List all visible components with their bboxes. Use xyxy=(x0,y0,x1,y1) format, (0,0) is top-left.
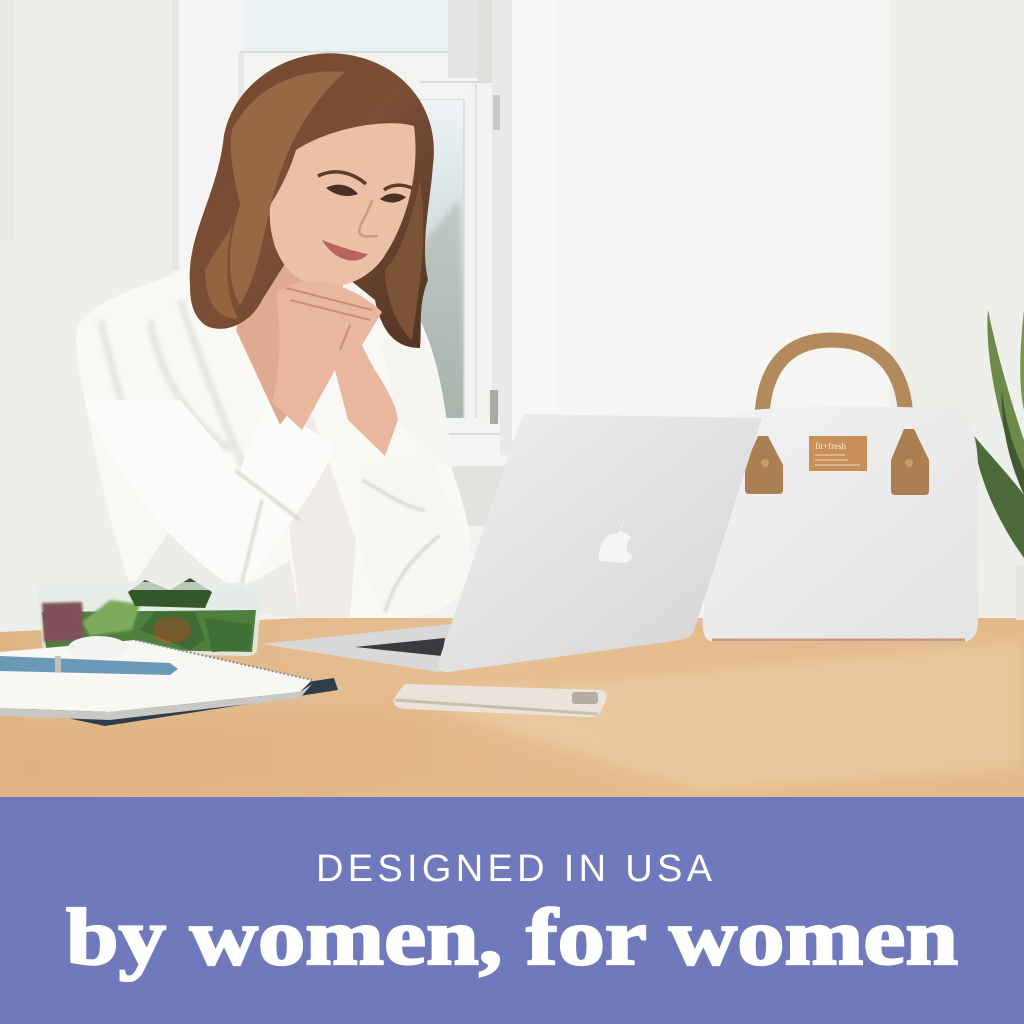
nose xyxy=(359,200,378,236)
blouse torso xyxy=(76,268,471,619)
hands and arms xyxy=(272,282,398,456)
keyboard base xyxy=(262,622,540,672)
insulated lunch bag xyxy=(703,340,978,642)
face xyxy=(270,123,416,287)
hair mass xyxy=(190,53,434,348)
window xyxy=(172,0,512,526)
lower glass xyxy=(416,100,464,418)
blouse folds xyxy=(240,320,356,618)
mouth xyxy=(322,240,368,261)
salad container xyxy=(36,578,264,656)
right sleeve and cuff xyxy=(359,450,474,614)
sash frame xyxy=(238,52,492,100)
left sleeve and cuff xyxy=(85,400,334,590)
banner headline: by women, for women xyxy=(66,894,958,982)
frame right side xyxy=(464,84,492,434)
hair highlights xyxy=(230,71,345,305)
insulated lunch bag: fit+fresh xyxy=(815,441,847,451)
eyebrows xyxy=(318,172,412,190)
banner background xyxy=(0,797,1024,1024)
handle tabs xyxy=(745,436,783,494)
neck and chest xyxy=(236,250,350,425)
room background wall xyxy=(0,0,1024,640)
woman xyxy=(76,53,474,619)
wood sheen on table xyxy=(420,640,1024,790)
brand label xyxy=(809,436,867,471)
phone xyxy=(393,684,607,717)
lid xyxy=(438,414,762,672)
handle xyxy=(762,340,906,440)
upper glass xyxy=(244,0,448,80)
banner subheading: DESIGNED IN USA xyxy=(316,848,713,890)
laptop xyxy=(262,414,762,672)
shoulder right xyxy=(382,300,452,470)
eyes xyxy=(326,185,358,196)
table xyxy=(0,618,1024,798)
body xyxy=(703,406,978,642)
plant xyxy=(972,310,1024,620)
notebook and pen xyxy=(0,636,338,726)
